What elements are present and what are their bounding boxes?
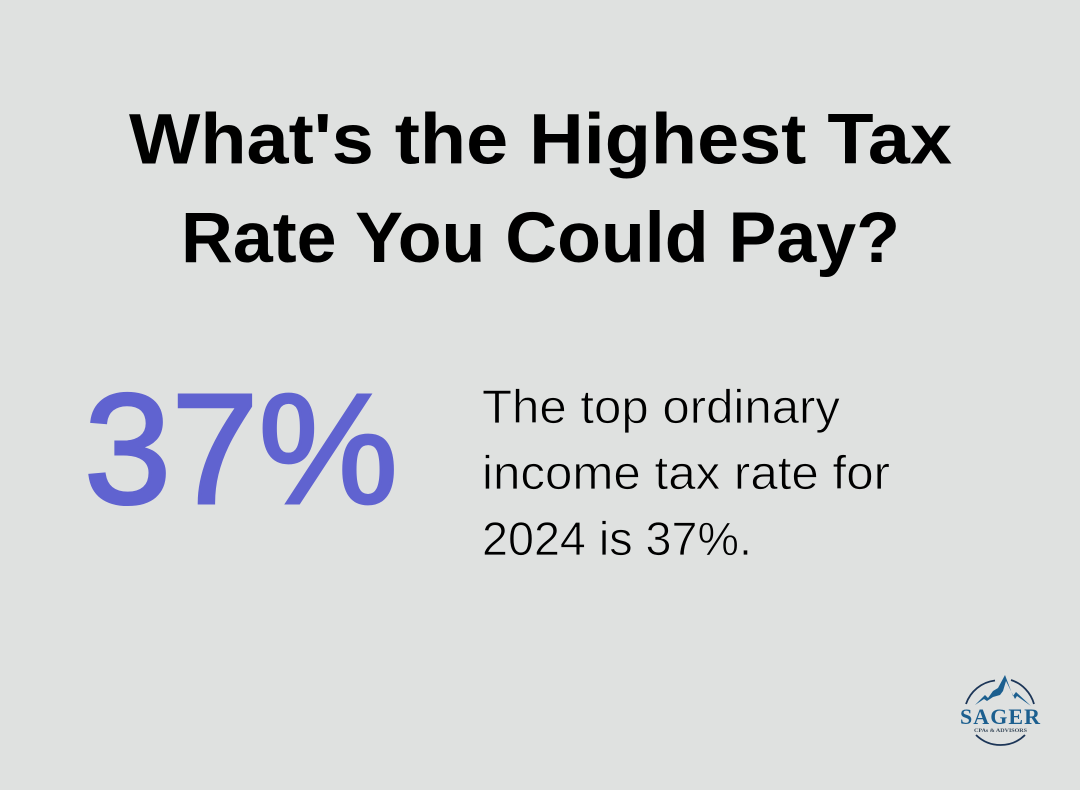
description text: The top ordinary <box>482 381 840 434</box>
big statistic: 37%: 37% <box>84 362 398 537</box>
logo wordmark: SAGER <box>960 704 1041 729</box>
logo tagline: CPAs & ADVISORS <box>974 728 1027 734</box>
logo: Sager CPAs & Advisors <box>960 675 1041 745</box>
description text: 2024 is 37%. <box>482 513 752 566</box>
title: Rate You Could Pay? <box>181 198 900 278</box>
title <box>129 100 952 278</box>
description text <box>482 381 890 566</box>
icon: mountain <box>975 675 1031 706</box>
title: What's the Highest Tax <box>129 100 952 180</box>
description text: income tax rate for <box>482 447 890 500</box>
logo ring arcs <box>966 680 1034 745</box>
